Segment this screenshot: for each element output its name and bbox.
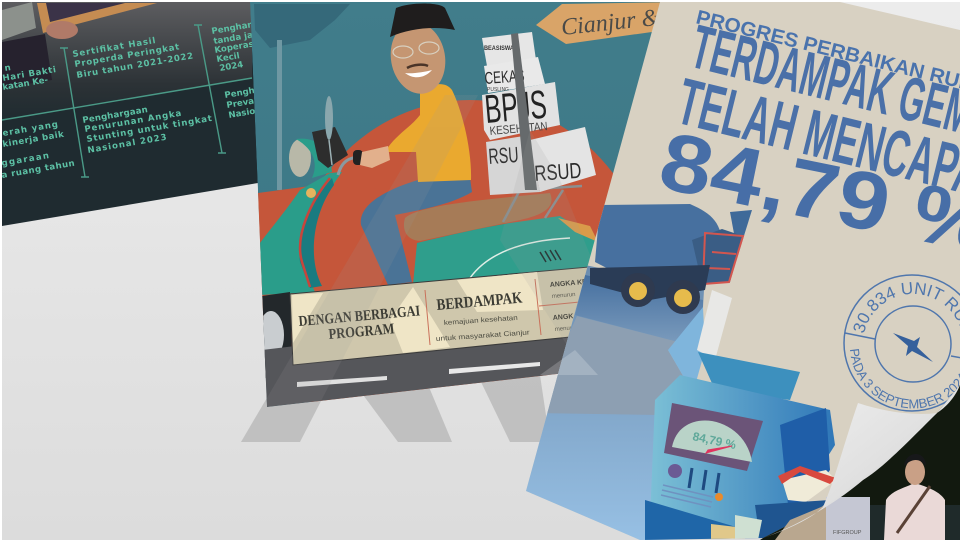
machine <box>645 352 835 540</box>
box: rsu: RSU <box>488 142 519 169</box>
award text: column 1: kinerja baik <box>2 130 65 150</box>
award photo strip <box>2 2 252 98</box>
award text: column 1: erah yang <box>2 120 59 139</box>
small boxes <box>711 515 762 540</box>
box: bpjs: KESEHATAN <box>489 119 548 138</box>
shirt <box>385 84 471 182</box>
award text: column 3: tanda jasa <box>213 29 265 47</box>
award text: column 1: Hari Bakti <box>2 65 57 84</box>
person <box>884 454 945 540</box>
award text: column 1: ggaraan <box>1 151 50 169</box>
corner photo <box>760 385 960 540</box>
gauge <box>664 403 763 471</box>
label banner: ANGKA <box>553 313 579 322</box>
road <box>264 338 568 407</box>
percentage: 84,79 % <box>652 115 960 272</box>
award text: column 2: Penurunan Angka <box>84 109 182 135</box>
box: cekas <box>484 57 545 93</box>
label banner: PROGRAM <box>328 321 395 343</box>
decorative net <box>254 4 350 48</box>
box: rsu <box>486 135 540 195</box>
award text: column 3: 2024 <box>219 60 244 74</box>
tail light <box>558 218 596 240</box>
direction sign: Cianjur & <box>560 5 662 41</box>
light beam <box>697 290 732 360</box>
front shield <box>260 172 342 295</box>
label banner: ANGKA KEMATIAN <box>550 276 614 289</box>
headlight <box>289 139 311 177</box>
red sun and ground <box>258 100 613 402</box>
vents <box>540 250 561 262</box>
box: upper <box>482 32 536 66</box>
label banner: menurun <box>552 292 576 300</box>
award text: column 3 <box>212 22 255 118</box>
award text: column 3: Kecil <box>216 51 241 65</box>
wall and sign: FIFGROUP <box>833 530 862 536</box>
label banner: kemajuan kesehatan <box>444 315 518 327</box>
box: bpjs <box>482 82 560 140</box>
smile <box>405 70 432 77</box>
dial and sliders <box>668 464 682 478</box>
page curl <box>763 385 960 538</box>
glasses <box>393 42 439 58</box>
award text: column 2 <box>72 36 213 156</box>
watermark highlight <box>540 350 598 375</box>
cargo boxes <box>482 32 596 195</box>
award text: column 2: Biru tahun 2021-2022 <box>76 51 194 81</box>
label banner: menurun <box>555 325 579 333</box>
award text: column 3: Penghargaan <box>224 80 289 101</box>
rider <box>360 4 472 285</box>
award text: column 1 <box>1 63 75 181</box>
conveyor <box>755 500 830 540</box>
box: cekas: CEKAS <box>484 66 525 88</box>
cargo rack <box>503 186 582 222</box>
award text: column 1: katan Ke- <box>2 75 49 93</box>
head <box>390 28 446 94</box>
award text: column 2: Stunting untuk tingkat <box>86 114 213 145</box>
stamp <box>843 274 960 412</box>
hand <box>360 146 390 168</box>
lower blue column <box>520 265 705 540</box>
dash and mirror <box>312 127 348 168</box>
street pole <box>277 40 282 190</box>
award text: column 1: n <box>4 63 12 74</box>
award text: column 2: Properda Peringkat <box>74 42 180 70</box>
watermark overlay on poster <box>241 95 665 442</box>
scooter <box>258 96 612 378</box>
box: bpjs: BPJS <box>483 83 549 132</box>
box: upper: BEASISWA <box>484 46 515 52</box>
award text: column 3: Koperasi <box>214 39 257 56</box>
gauge: 84,79 % <box>691 429 738 452</box>
cap <box>390 4 455 37</box>
house <box>778 466 836 502</box>
strap <box>511 33 537 190</box>
seat <box>404 193 551 241</box>
award text: column 2: Nasional 2023 <box>87 133 167 156</box>
award text: column 3: Nasional <box>228 104 271 121</box>
box: rsud <box>530 127 596 192</box>
label banner: untuk masyarakat Cianjur <box>436 329 531 343</box>
box: cekas: PUSLING <box>487 87 509 93</box>
label banner <box>290 266 614 365</box>
award text: column 3: Prevalensi <box>226 93 278 111</box>
watermark logo <box>241 95 665 442</box>
truck <box>590 204 752 314</box>
handlebar <box>336 156 353 176</box>
box: rsud: RSUD <box>534 158 582 186</box>
label banner: DENGAN BERBAGAI <box>298 303 421 330</box>
wall and sign <box>775 497 960 540</box>
award text: column 2: Penghargaan <box>82 105 149 126</box>
rear wheel <box>515 326 575 354</box>
panel: scooter poster <box>250 2 660 407</box>
panel: awards poster <box>2 2 258 226</box>
jeans <box>361 178 472 285</box>
award grid lines <box>2 25 252 177</box>
award text: column 3: Penghargaan <box>211 16 276 37</box>
award text: column 1: a ruang tahun <box>1 159 75 181</box>
award text: column 2: Sertifikat Hasil <box>72 36 156 60</box>
front wheel <box>262 292 292 378</box>
label banner: BERDAMPAK <box>436 290 523 314</box>
rear body <box>413 216 595 282</box>
direction sign <box>536 2 660 44</box>
